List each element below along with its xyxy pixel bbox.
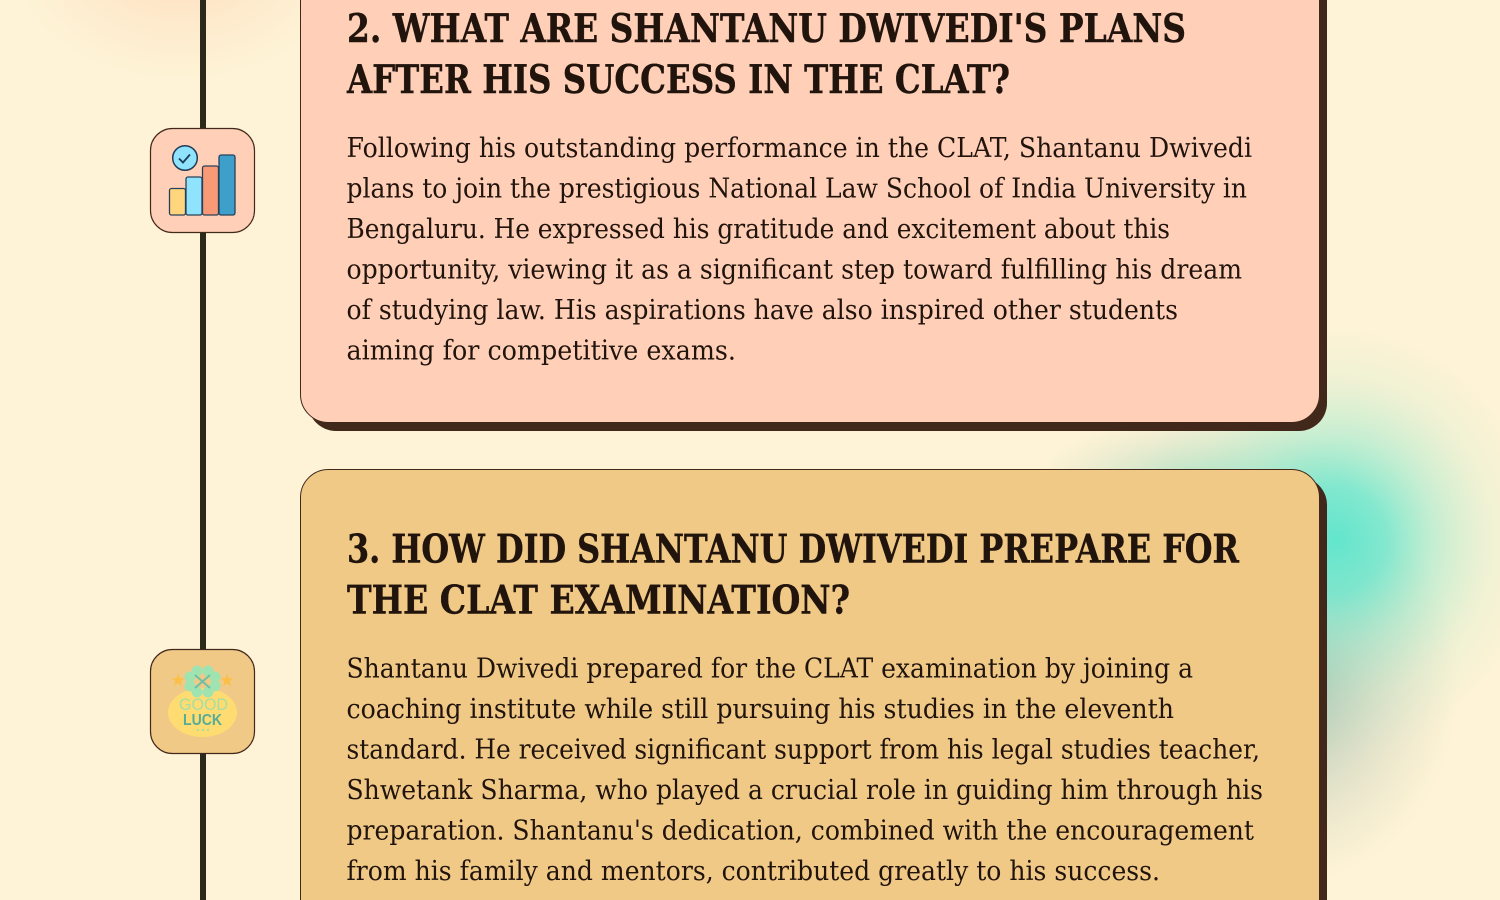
panel 3 body text: from his family and mentors, contributed greatly to his success. — [346, 856, 1160, 887]
background glow: grey teal — [1120, 475, 1460, 885]
icon: good luck clover — [150, 650, 254, 754]
icon: good luck clover: LUCK — [183, 712, 223, 729]
timeline line — [200, 0, 206, 900]
panel 3 card — [300, 470, 1320, 900]
background glow: peach — [0, 0, 400, 90]
panel: question 3 — [300, 470, 1327, 900]
panel 2 card — [300, 0, 1320, 423]
panel 2 heading: 2. WHAT ARE SHANTANU DWIVEDI'S PLANS — [347, 6, 1186, 52]
panel 2 body text — [346, 133, 1252, 366]
icon: bar chart with check — [150, 128, 254, 232]
panel 2 body text: opportunity, viewing it as a significant step toward fulfilling his dream — [346, 254, 1242, 285]
panel 3 heading — [347, 526, 1240, 624]
panel 3 body text: coaching institute while still pursuing his studies in the eleventh — [346, 694, 1174, 725]
panel 3 body text: Shantanu Dwivedi prepared for the CLAT examination by joining a — [346, 653, 1193, 684]
panel 3 heading: 3. HOW DID SHANTANU DWIVEDI PREPARE FOR — [347, 526, 1240, 572]
icon: good luck clover: GOOD — [179, 695, 228, 714]
icon: good luck clover: ★ — [219, 671, 235, 691]
panel 3 heading: THE CLAT EXAMINATION? — [347, 578, 850, 624]
icon: good luck clover: ★ — [170, 671, 186, 691]
panel 2 body text: Following his outstanding performance in the CLAT, Shantanu Dwivedi — [346, 133, 1252, 164]
panel 2 shadow — [308, 0, 1327, 431]
panel 2 heading — [346, 6, 1186, 103]
panel 3 body text — [346, 653, 1263, 887]
background glow: teal tail — [1030, 415, 1370, 565]
panel 3 shadow — [308, 477, 1327, 900]
panel 2 body text: aiming for competitive exams. — [346, 335, 736, 366]
panel: question 2 — [300, 0, 1327, 431]
panel 3 body text: preparation. Shantanu's dedication, combined with the encouragement — [346, 815, 1254, 846]
panel 3 body text: standard. He received significant support from his legal studies teacher, — [346, 734, 1260, 765]
background glow: teal — [1130, 325, 1500, 755]
panel 2 heading: AFTER HIS SUCCESS IN THE CLAT? — [346, 57, 1010, 103]
panel 3 body text: Shwetank Sharma, who played a crucial role in guiding him through his — [346, 775, 1263, 806]
panel 2 body text: of studying law. His aspirations have also inspired other students — [346, 295, 1178, 326]
panel 2 body text: plans to join the prestigious National Law School of India University in — [346, 173, 1247, 204]
panel 2 body text: Bengaluru. He expressed his gratitude and excitement about this — [346, 214, 1170, 245]
